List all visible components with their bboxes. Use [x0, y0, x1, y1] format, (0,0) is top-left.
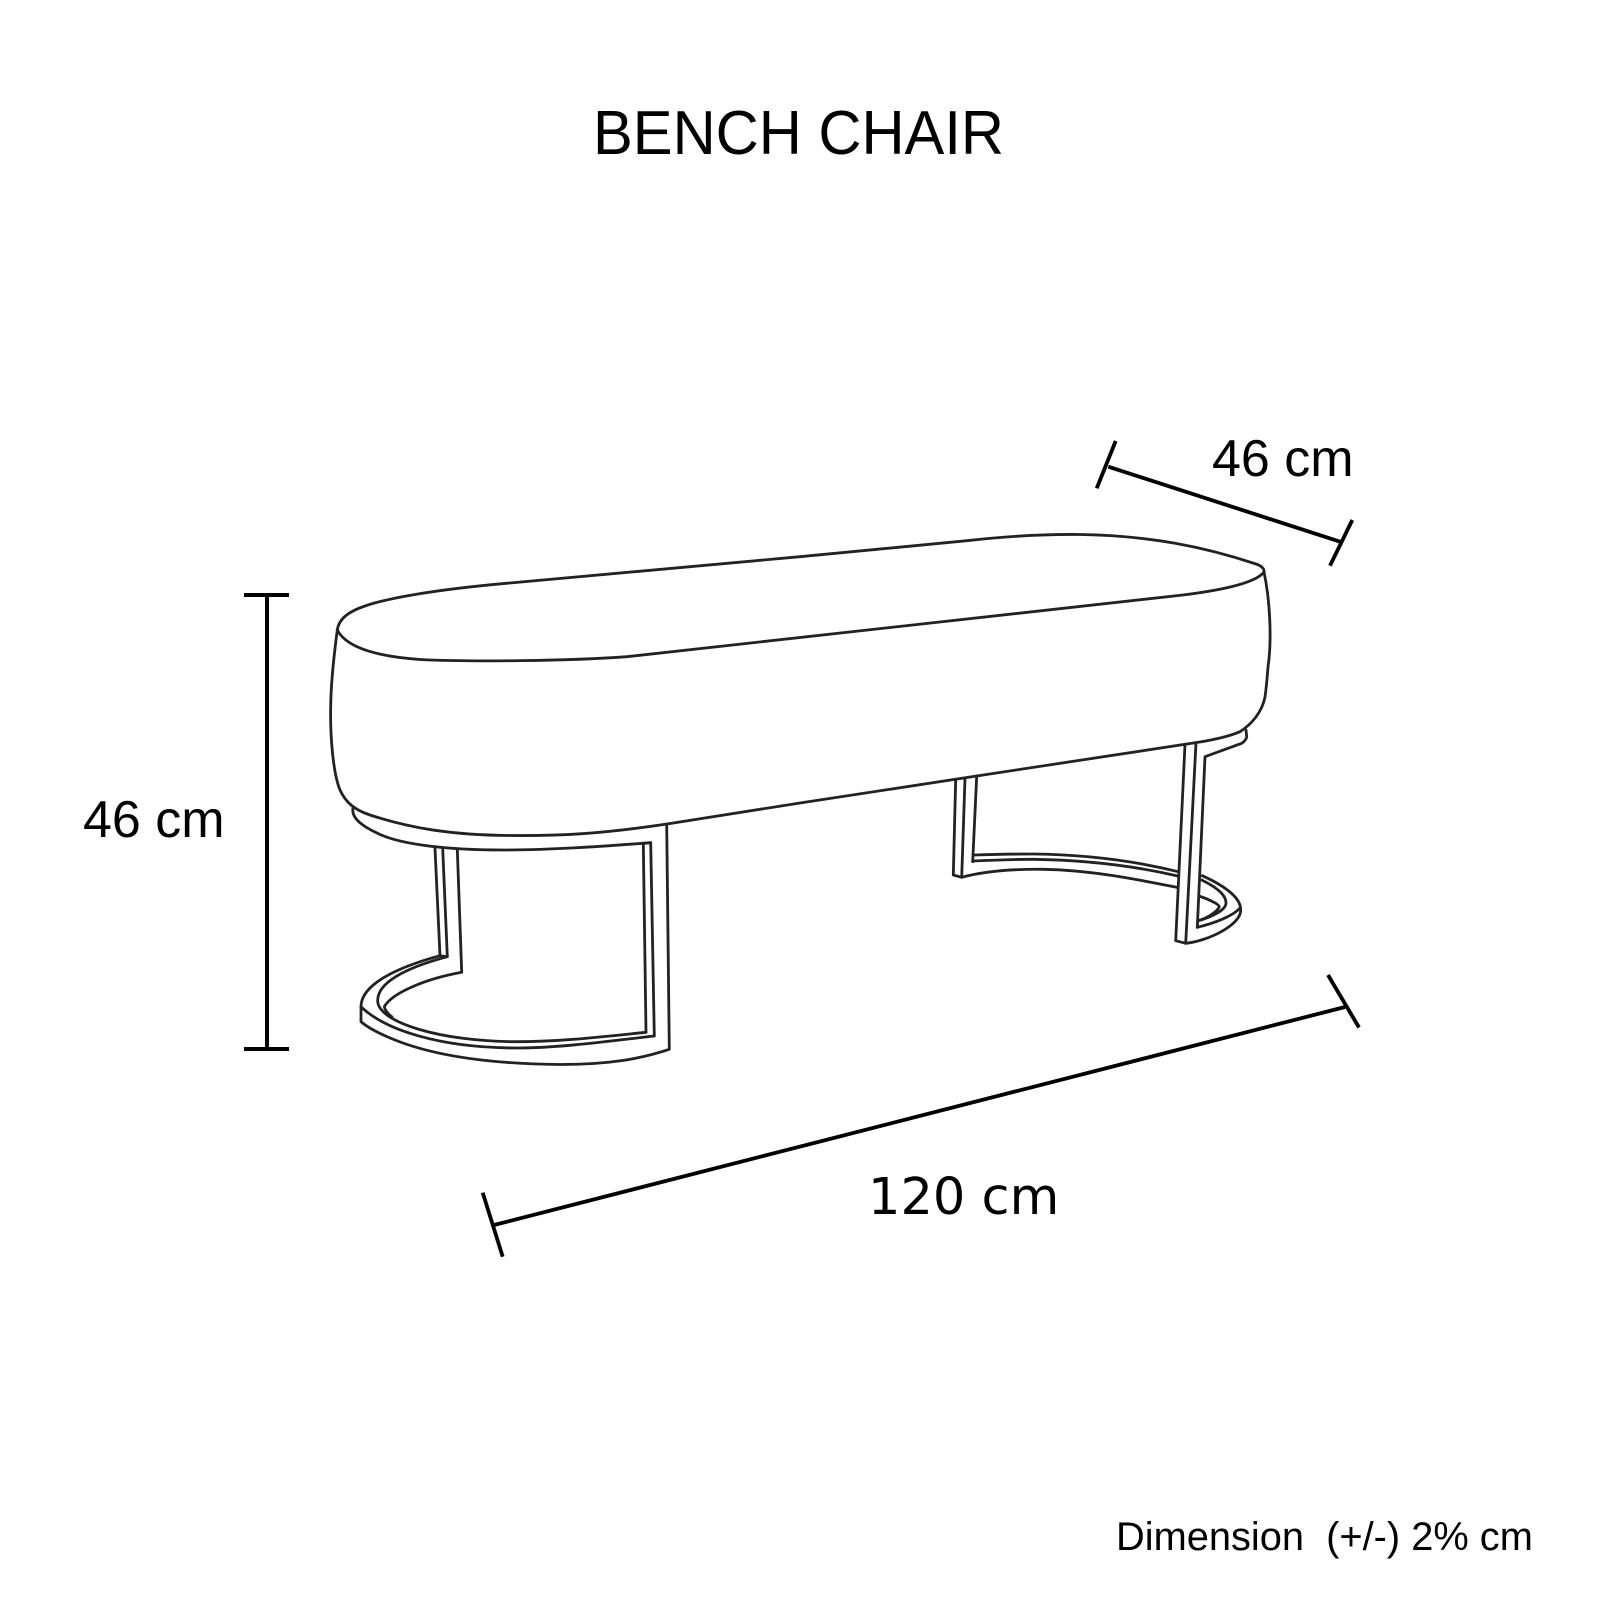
dimension: height 46 cm: [83, 595, 289, 1049]
footnote: tolerance: Dimension (+/-) 2% cm: [1116, 1515, 1533, 1559]
dimension: depth 46 cm: [1097, 430, 1354, 566]
front left leg: [353, 808, 669, 1064]
bench seat cushion: [331, 534, 1270, 836]
label: depth: 46 cm: [1212, 430, 1354, 488]
back left leg: [953, 776, 1178, 887]
bench illustration: [331, 534, 1270, 1064]
dimension: width 120 cm: [483, 975, 1359, 1257]
label: height: 46 cm: [83, 791, 225, 849]
front right leg: [1176, 730, 1247, 943]
label: width: 120 cm: [868, 1168, 1059, 1227]
title: BENCH CHAIR: [593, 99, 1004, 168]
